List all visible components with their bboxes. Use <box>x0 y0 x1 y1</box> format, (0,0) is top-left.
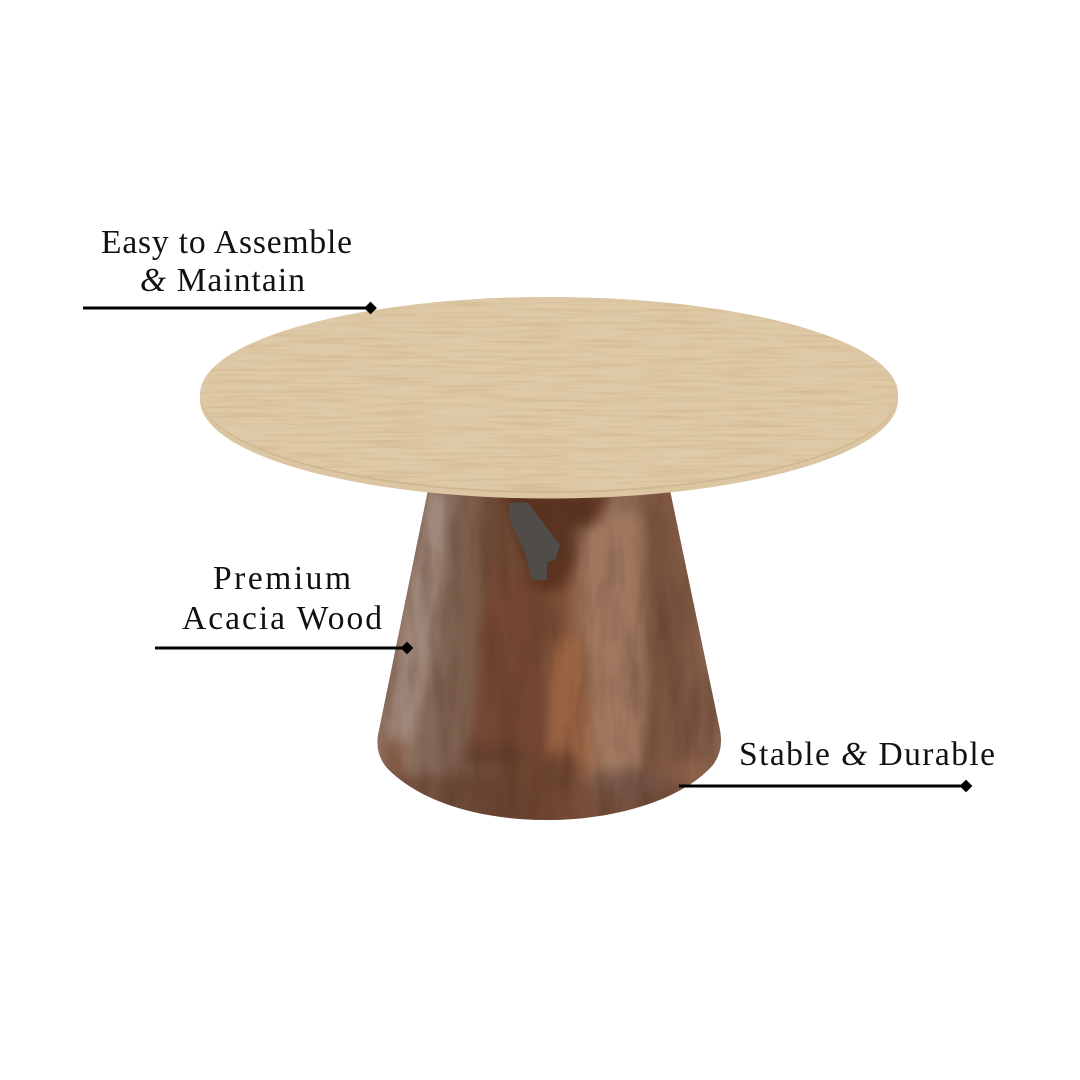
callout: Premium Acacia Wood: Acacia Wood <box>182 600 382 637</box>
callout: Stable & Durable: Stable & Durable <box>739 736 995 773</box>
callout: Premium Acacia Wood: Premium <box>213 560 351 597</box>
dark grey speckled patch <box>509 502 560 580</box>
callout: Easy to Assemble & Maintain <box>83 224 377 314</box>
pale left highlight <box>385 490 456 740</box>
callout: Easy to Assemble & Maintain: Easy to Assemble <box>101 224 352 261</box>
callout: Premium Acacia Wood <box>155 560 413 654</box>
table base: acacia wood cone <box>370 490 730 830</box>
warm centre <box>548 640 592 770</box>
table top: travertine disc <box>200 295 900 498</box>
table illustration <box>200 295 900 830</box>
callout: Stable & Durable <box>679 736 995 792</box>
dark bottom band <box>399 772 684 820</box>
dark V under the top <box>500 492 610 590</box>
callout: Easy to Assemble & Maintain: & Maintain <box>140 262 305 299</box>
